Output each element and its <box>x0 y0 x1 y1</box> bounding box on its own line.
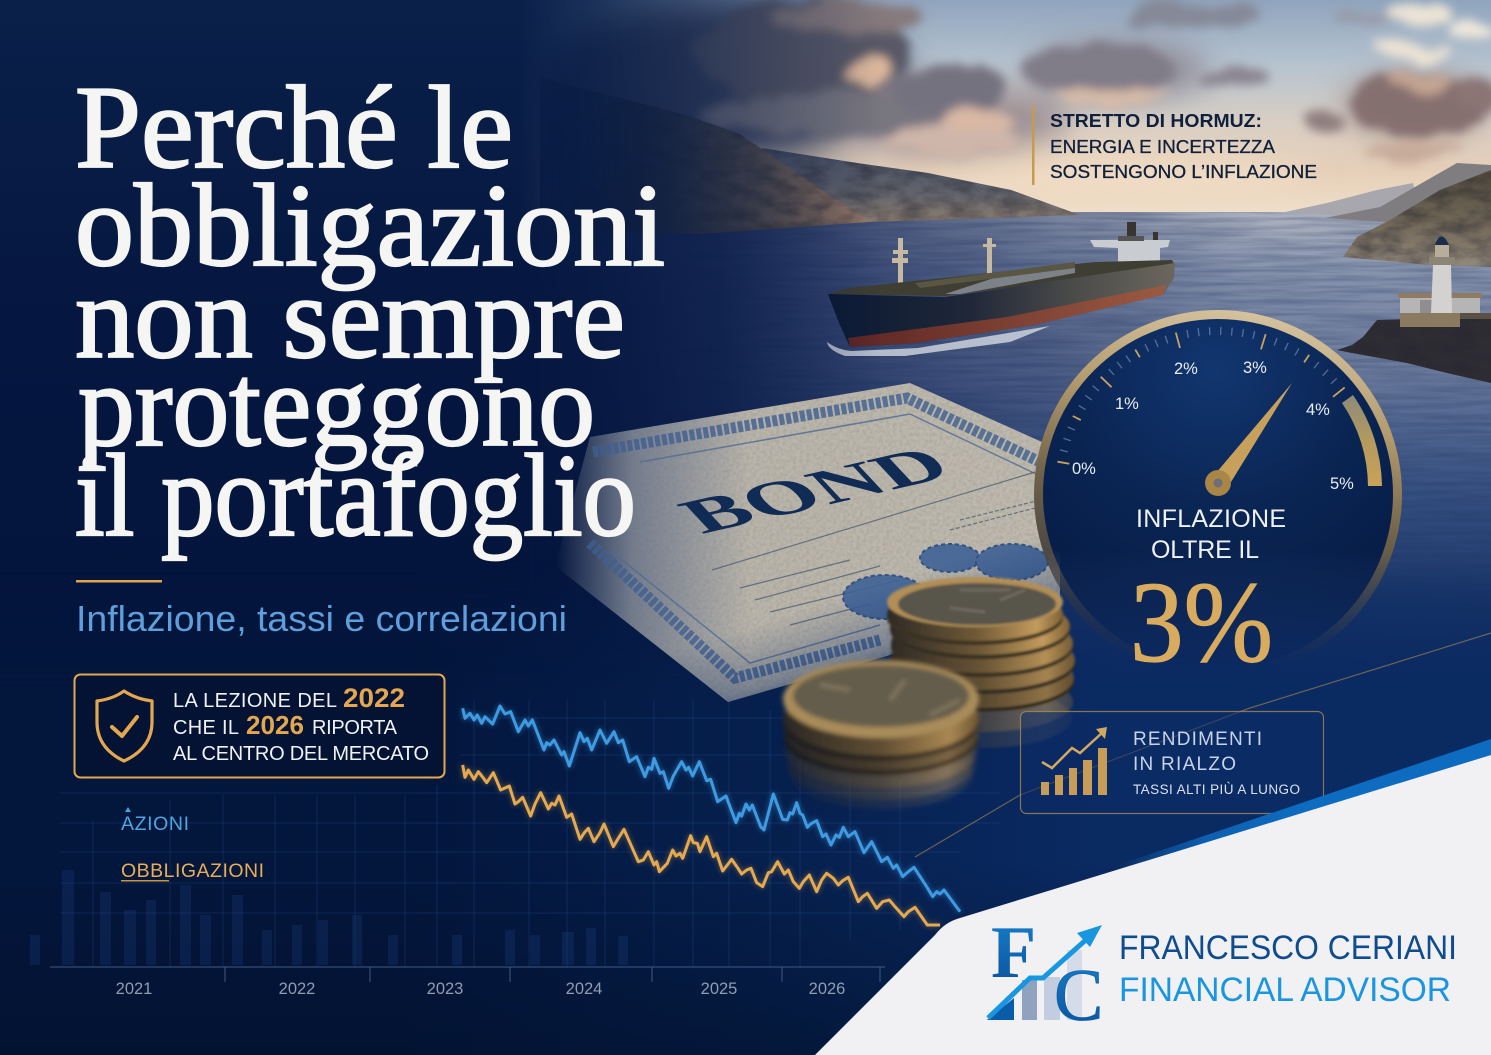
bond fine lines <box>712 472 1040 625</box>
logo text: FRANCESCO CERIANI <box>1119 929 1457 967</box>
caption: stretto di Hormuz <box>1032 105 1317 185</box>
gauge scale labels <box>1072 359 1354 493</box>
left cliffs <box>540 76 1080 234</box>
callout text: TASSI ALTI PIÙ A LUNGO <box>1133 782 1300 797</box>
callout text <box>1133 729 1300 797</box>
bond certificate <box>555 383 1060 702</box>
right coin stack <box>887 577 1075 748</box>
tanker ship <box>827 222 1175 356</box>
right cliffs <box>1285 163 1491 267</box>
ship deck <box>830 260 1175 296</box>
gauge dial <box>1043 319 1393 669</box>
title: obbligazioni <box>75 160 665 291</box>
callout text: 2022 <box>343 683 405 713</box>
axis year labels: 2024 <box>566 980 602 998</box>
clouds <box>530 0 1491 202</box>
axis year labels <box>116 980 845 998</box>
ship masts <box>892 238 996 294</box>
gauge high zone arc <box>1342 395 1382 486</box>
title <box>75 62 665 561</box>
callout: lezione 2022 <box>74 674 444 778</box>
gauge body: bezel and dial <box>1034 310 1402 678</box>
icon: shield with check <box>97 691 152 761</box>
logo mark: F <box>991 912 1036 994</box>
ship red waterline <box>848 285 1166 347</box>
bond paper <box>555 383 1060 702</box>
caption: stretto di Hormuz: SOSTENGONO L’INFLAZIONE <box>1050 162 1317 182</box>
gauge caption: OLTRE IL <box>1151 536 1259 564</box>
gauge caption: INFLAZIONE <box>1136 505 1286 533</box>
lighthouse tower <box>1429 236 1455 313</box>
gauge caption <box>1136 505 1286 564</box>
sea <box>450 212 1491 702</box>
ship wake <box>827 326 1050 356</box>
title: non sempre <box>75 252 625 383</box>
ship hull <box>828 263 1175 347</box>
legend <box>121 807 264 882</box>
blue line: azioni <box>463 706 960 912</box>
callout text: RIPORTA <box>312 717 398 739</box>
callout text <box>173 683 429 765</box>
ship superstructure <box>1090 222 1170 266</box>
axis year labels: 2023 <box>427 980 463 998</box>
lower navy panel <box>525 630 1491 1055</box>
building <box>1398 293 1491 327</box>
bond shadow <box>555 383 1060 702</box>
gold rule under title <box>76 580 162 582</box>
line chart <box>463 706 960 925</box>
callout text: CHE IL <box>173 717 239 739</box>
time axis <box>50 967 885 998</box>
caption: stretto di Hormuz: STRETTO DI HORMUZ: <box>1050 111 1262 131</box>
sea left shading <box>450 212 1260 702</box>
logo mark: C <box>1054 955 1103 1037</box>
gauge scale labels: 2% <box>1174 360 1198 378</box>
sky <box>450 0 1491 214</box>
gauge scale labels: 0% <box>1072 460 1096 478</box>
white logo panel <box>815 755 1491 1055</box>
callout text: IN RIALZO <box>1133 754 1236 775</box>
logo text: FINANCIAL ADVISOR <box>1119 971 1451 1009</box>
rocky headland <box>1337 317 1491 383</box>
inflation gauge <box>1034 310 1402 687</box>
bond ornamental border <box>590 398 1040 678</box>
diagonal thin rule <box>915 633 1491 857</box>
title: Perché le <box>75 62 513 193</box>
gauge bezel <box>1034 310 1402 678</box>
gauge value: 3% <box>1130 559 1273 687</box>
axis year labels: 2026 <box>809 980 845 998</box>
coin stacks <box>783 577 1075 809</box>
logo text <box>1119 929 1457 1009</box>
axis year labels: 2022 <box>279 980 315 998</box>
bond seal ornament <box>843 544 1048 619</box>
navy overlay left <box>0 0 868 651</box>
gauge minor ticks <box>1060 327 1337 452</box>
lighthouse headland <box>1337 236 1491 383</box>
callout: rendimenti in rialzo <box>1020 712 1324 814</box>
bond title: BOND <box>665 436 964 544</box>
logo <box>987 912 1457 1037</box>
legend: azioni: AZIONI <box>121 813 189 835</box>
left coin stack <box>783 660 979 809</box>
bottom vignette <box>0 860 1491 1055</box>
axis year labels: 2025 <box>701 980 737 998</box>
orange line: obbligazioni <box>463 765 940 925</box>
blue corner band <box>1115 739 1491 868</box>
gauge scale labels: 1% <box>1115 395 1139 413</box>
callout text: RENDIMENTI <box>1133 729 1262 750</box>
gauge needle <box>1205 383 1292 496</box>
legend: obbligazioni: OBBLIGAZIONI <box>121 860 264 882</box>
gauge major ticks <box>1057 333 1345 464</box>
icon: rising bars and arrow <box>1041 727 1107 795</box>
chart grid <box>60 700 1000 967</box>
callout text: 2026 <box>246 710 304 740</box>
caption: stretto di Hormuz: ENERGIA E INCERTEZZA <box>1050 137 1275 157</box>
axis year labels: 2021 <box>116 980 152 998</box>
gauge scale labels: 3% <box>1243 359 1267 377</box>
candlesticks background <box>30 870 628 965</box>
gauge scale labels: 5% <box>1330 475 1354 493</box>
title: il portafoglio <box>75 430 636 561</box>
callout text: LA LEZIONE DEL <box>173 690 337 712</box>
callout text: AL CENTRO DEL MERCATO <box>173 743 429 765</box>
gauge scale labels: 4% <box>1306 401 1330 419</box>
subtitle: Inflazione, tassi e correlazioni <box>76 598 567 639</box>
logo mark <box>987 912 1103 1037</box>
title: proteggono <box>78 340 595 471</box>
